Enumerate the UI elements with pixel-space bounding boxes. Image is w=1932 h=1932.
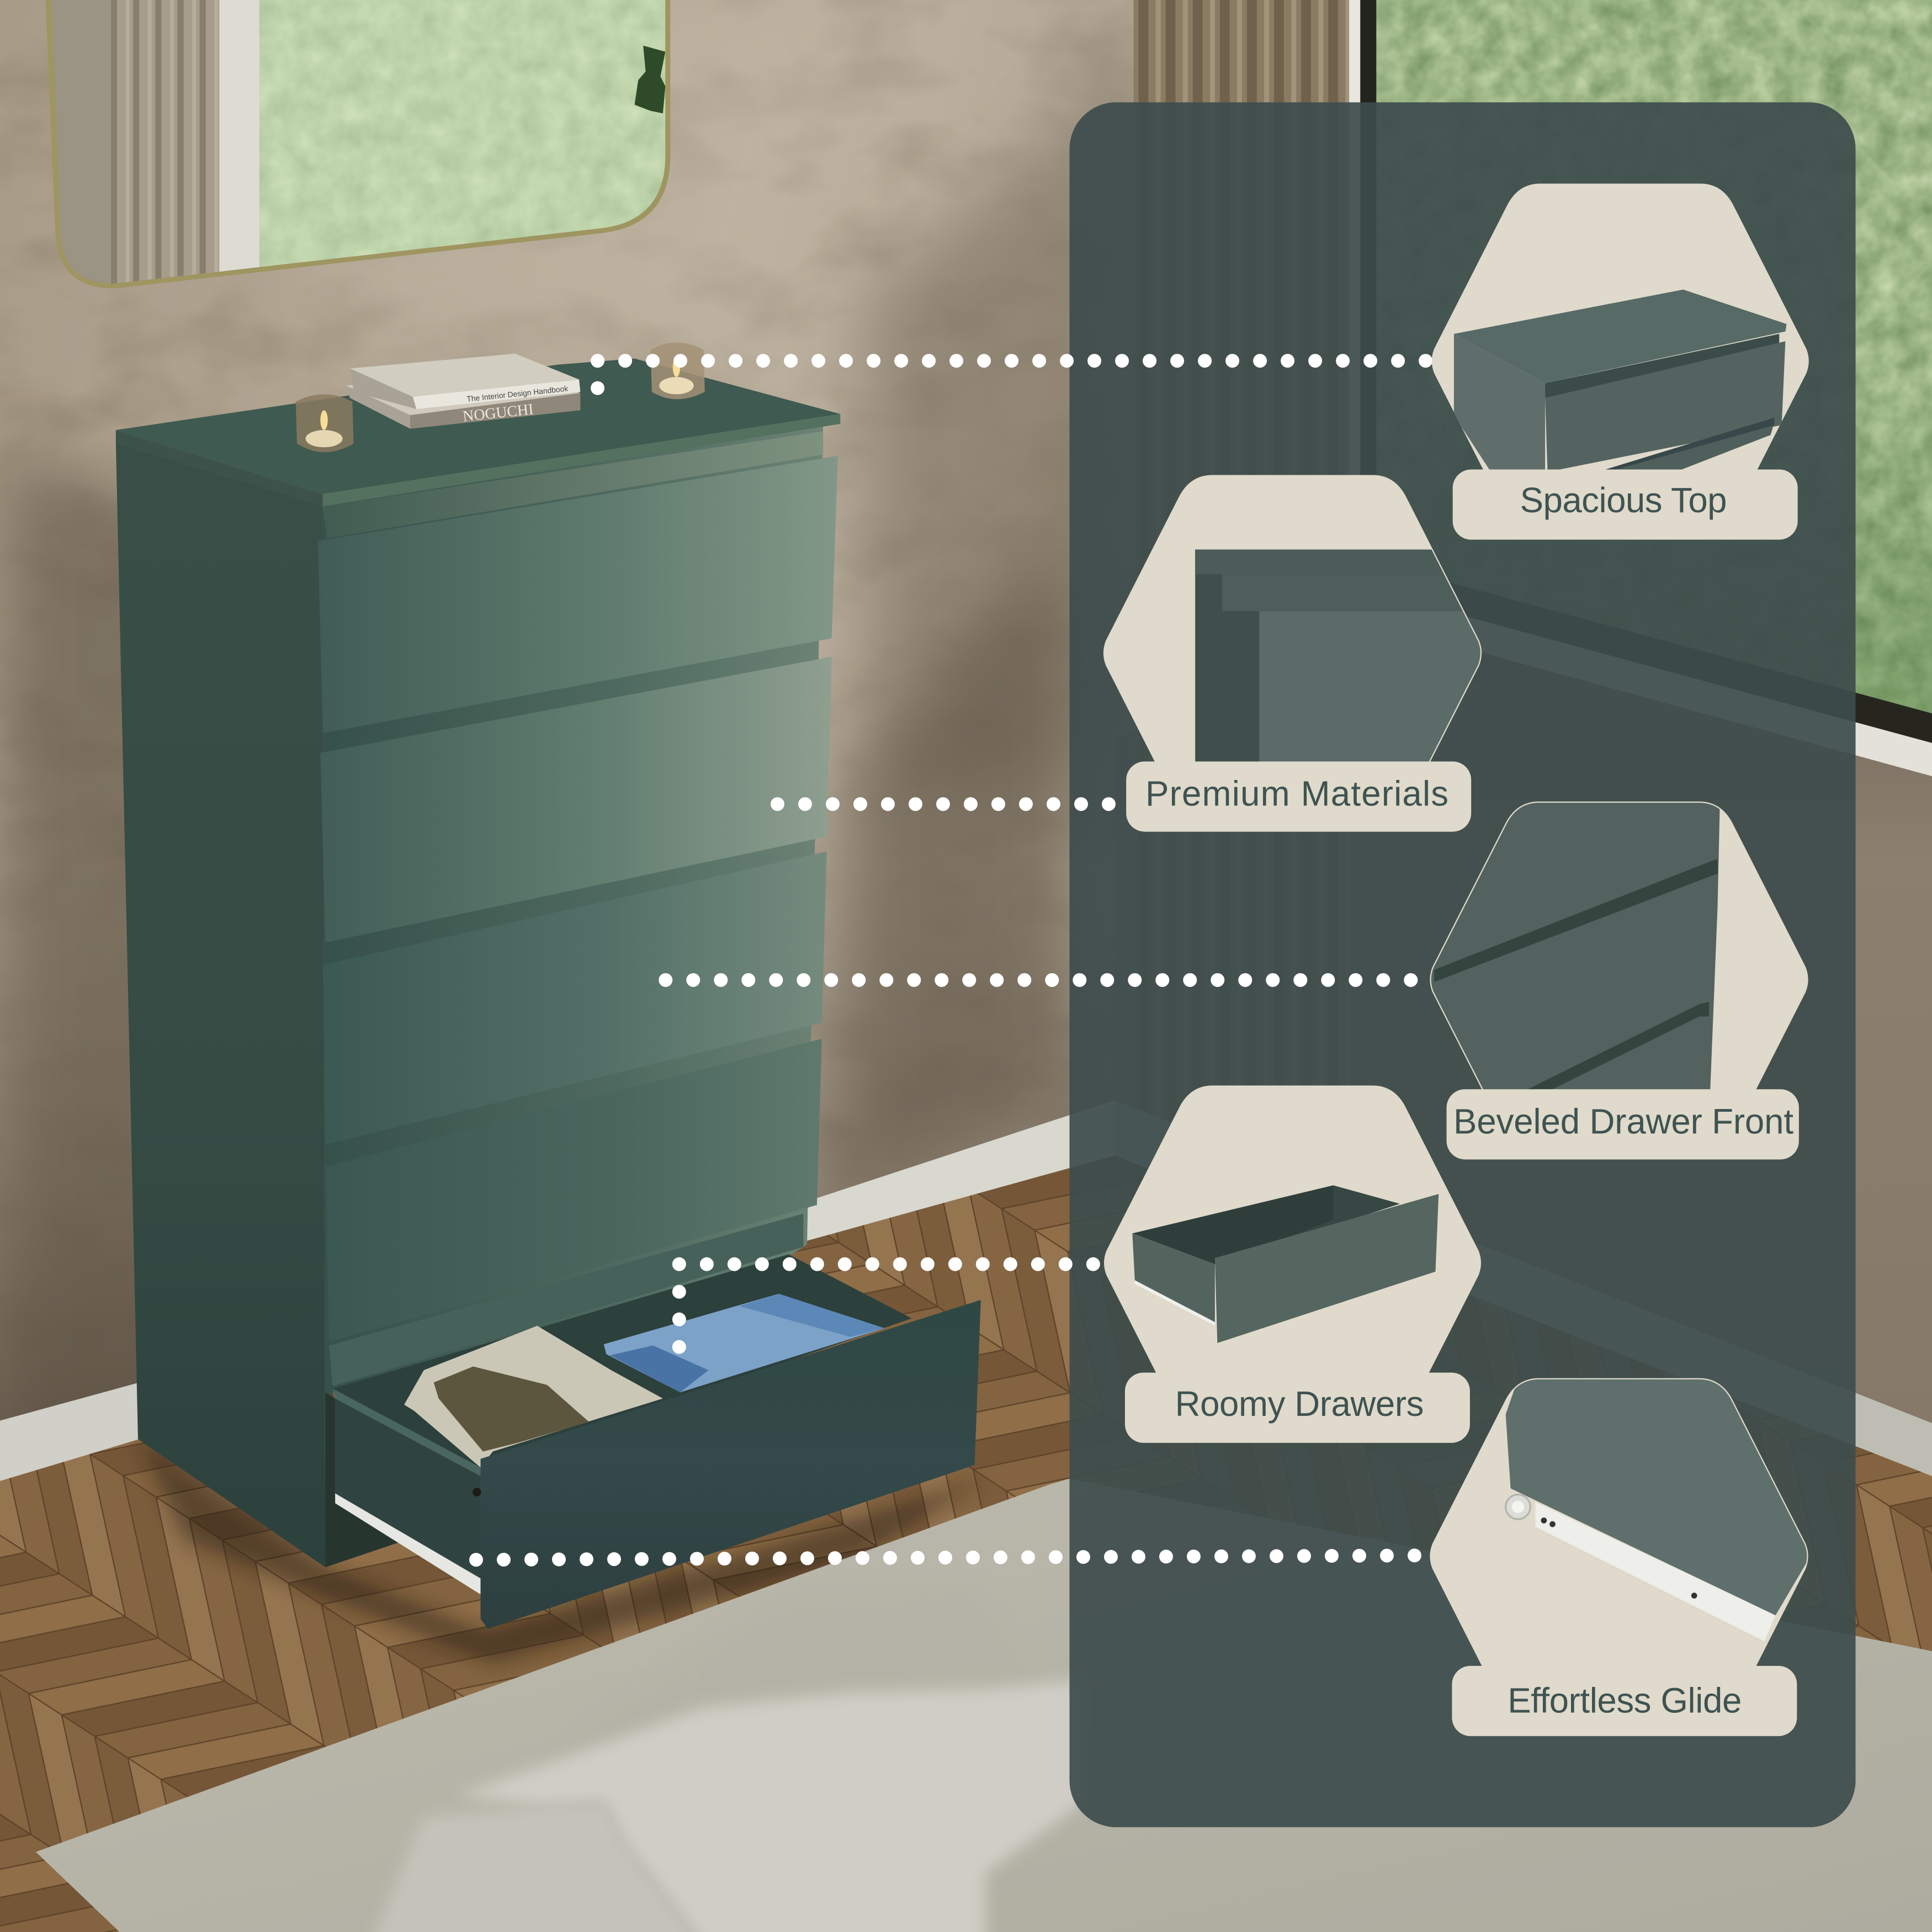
lower ledge (329, 1214, 803, 1386)
drawer front 4 (325, 1039, 822, 1342)
dresser side panel (116, 441, 325, 1567)
open drawer (333, 1254, 981, 1629)
label: roomy drawers: Roomy Drawers (1175, 1384, 1424, 1424)
floor (0, 1146, 1932, 1932)
hexagon detail: layered panels (1104, 476, 1493, 845)
candle left (296, 394, 354, 452)
dresser carcass front (323, 425, 823, 1567)
drawer side wall (335, 1398, 481, 1589)
hexagon detail: beveled edges (1422, 795, 1808, 1157)
right wall below window (1115, 616, 1932, 1423)
olive knit clothes (434, 1366, 589, 1451)
lower book: NOGUCHI (462, 401, 534, 425)
label: spacious top (1453, 469, 1798, 540)
drawer front (481, 1300, 981, 1629)
dotted leader: premium materials (777, 801, 1110, 807)
label: effortless glide (1452, 1666, 1797, 1736)
feature: beveled drawer front (1422, 795, 1808, 1159)
mirror (46, 0, 678, 296)
label: effortless glide: Effortless Glide (1508, 1681, 1742, 1720)
hexagon detail: dresser top (1432, 184, 1809, 538)
drawer front 2 (320, 657, 832, 943)
dotted leader: roomy drawers (679, 1264, 1094, 1348)
top front edge (323, 414, 840, 506)
lower book (346, 365, 580, 429)
upper book (350, 354, 580, 409)
feature: roomy drawers (1104, 1086, 1481, 1443)
feature: effortless glide (1431, 1371, 1816, 1736)
rug (36, 1479, 1932, 1932)
feature: spacious top (1432, 184, 1809, 540)
label: beveled drawer front (1447, 1089, 1799, 1159)
drawer front 3 (323, 851, 827, 1145)
baseboards (0, 1100, 1932, 1481)
dotted leader: beveled drawer front (666, 977, 1412, 983)
drawer interior (333, 1254, 912, 1467)
hexagon detail: drawer slide (1431, 1371, 1816, 1734)
window with foliage (1348, 0, 1932, 776)
dresser (116, 359, 840, 1567)
upper book: The Interior Design Handbook (466, 384, 569, 404)
dotted leader: spacious top (591, 361, 1427, 395)
hexagon detail: pulled-out drawer (1104, 1086, 1481, 1440)
curtain (1134, 0, 1349, 1121)
carcass dark base (325, 1392, 413, 1567)
top left edge (116, 430, 323, 506)
label: premium materials (1126, 761, 1471, 832)
drawer front 1 (318, 456, 838, 733)
label: premium materials: Premium Materials (1145, 774, 1448, 813)
folded denim (604, 1294, 885, 1392)
label: spacious top: Spacious Top (1520, 481, 1727, 520)
feature: premium materials (1104, 476, 1493, 845)
candle right (651, 343, 705, 399)
dresser top (116, 359, 840, 494)
label: beveled drawer front: Beveled Drawer Front (1453, 1102, 1793, 1142)
folded beige clothes (404, 1326, 663, 1467)
panel: features background (1070, 102, 1856, 1827)
dotted leader: effortless glide (476, 1556, 1416, 1560)
decor on top of dresser (296, 343, 705, 452)
strip under top (323, 431, 823, 538)
drawer slide rail (335, 1493, 481, 1594)
label: roomy drawers (1125, 1373, 1470, 1443)
